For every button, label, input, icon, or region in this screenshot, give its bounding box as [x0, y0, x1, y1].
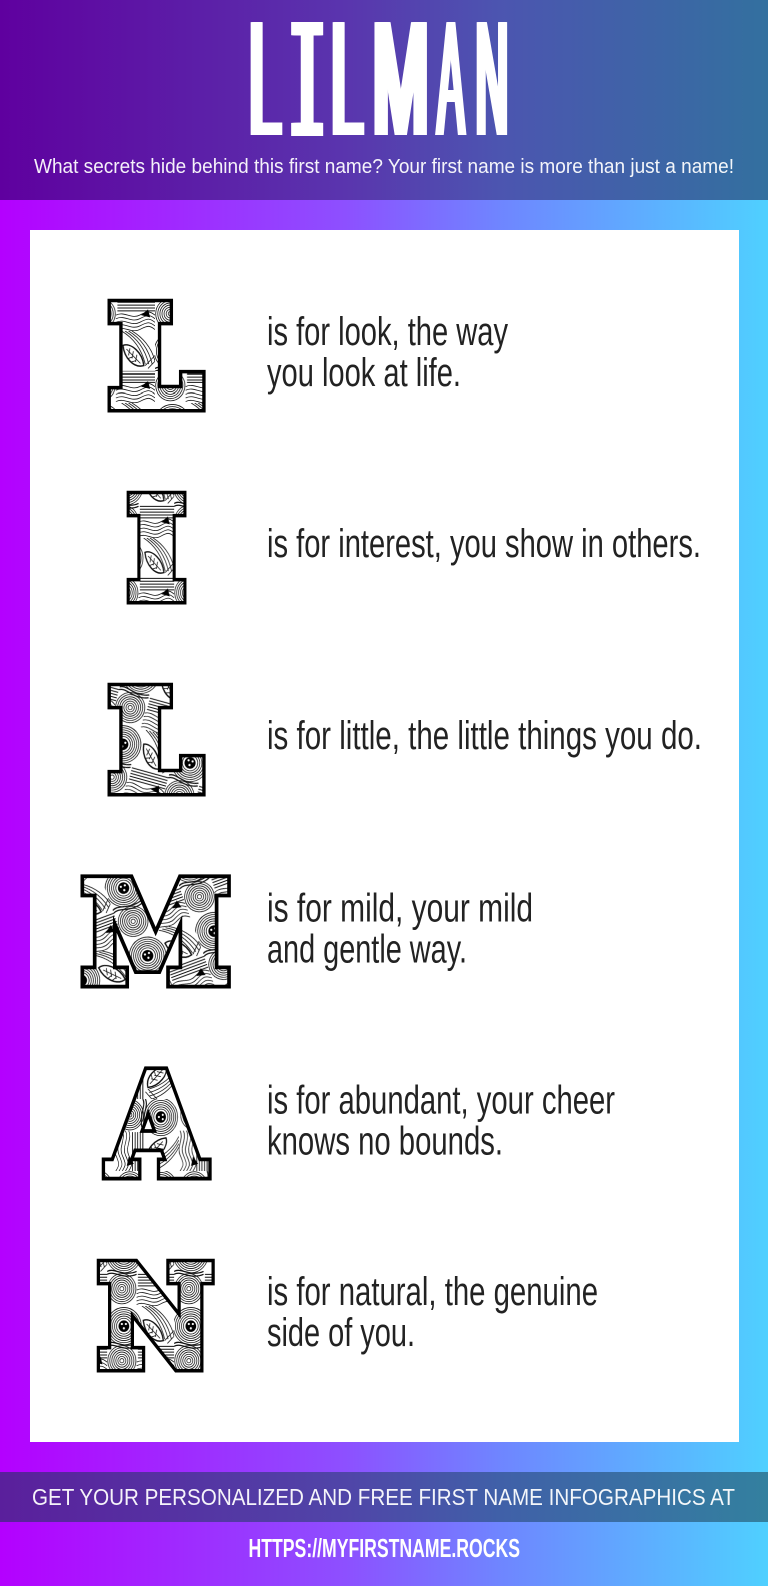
- icon: doodle letter A: A: [108, 1046, 205, 1206]
- row: A for abundant: [108, 1046, 615, 1206]
- icon: doodle letter L: L: [111, 282, 199, 435]
- white panel: [30, 230, 739, 1442]
- icon: doodle letter M: M: [82, 854, 230, 1013]
- caption N: side of you.: [267, 1311, 415, 1355]
- caption A: is for abundant, your cheer: [267, 1078, 615, 1122]
- row: L for look: [111, 282, 508, 435]
- footer url: HTTPS://MYFIRSTNAME.ROCKS: [248, 1533, 520, 1563]
- icon: doodle letter L: L: [111, 282, 199, 435]
- icon: doodle letter N: N: [100, 1241, 211, 1394]
- icon: doodle letter L: L: [111, 666, 199, 819]
- caption L: is for look, the way: [267, 310, 508, 354]
- row: M for mild: [82, 854, 533, 1013]
- subtitle: What secrets hide behind this first name? Your first name is more than just a name!: [34, 156, 734, 178]
- caption A: knows no bounds.: [267, 1120, 503, 1164]
- icon: doodle letter L: L: [111, 666, 199, 819]
- icon: doodle letter I: I: [130, 473, 183, 626]
- icon: doodle letter M: M: [82, 854, 230, 1013]
- caption M: is for mild, your mild: [267, 886, 533, 930]
- footer strip: [0, 1472, 768, 1522]
- row: I for interest: [130, 473, 701, 626]
- header band: [0, 0, 768, 200]
- row: N for natural: [100, 1241, 598, 1394]
- row: L for little: [111, 666, 702, 819]
- caption M: and gentle way.: [267, 928, 467, 972]
- title: [246, 0, 508, 188]
- icon: doodle letter A: A: [108, 1046, 205, 1206]
- icon: doodle letter I: I: [130, 473, 183, 626]
- icon: doodle letter N: N: [100, 1241, 211, 1394]
- caption N: is for natural, the genuine: [267, 1270, 598, 1314]
- caption L: you look at life.: [267, 351, 461, 395]
